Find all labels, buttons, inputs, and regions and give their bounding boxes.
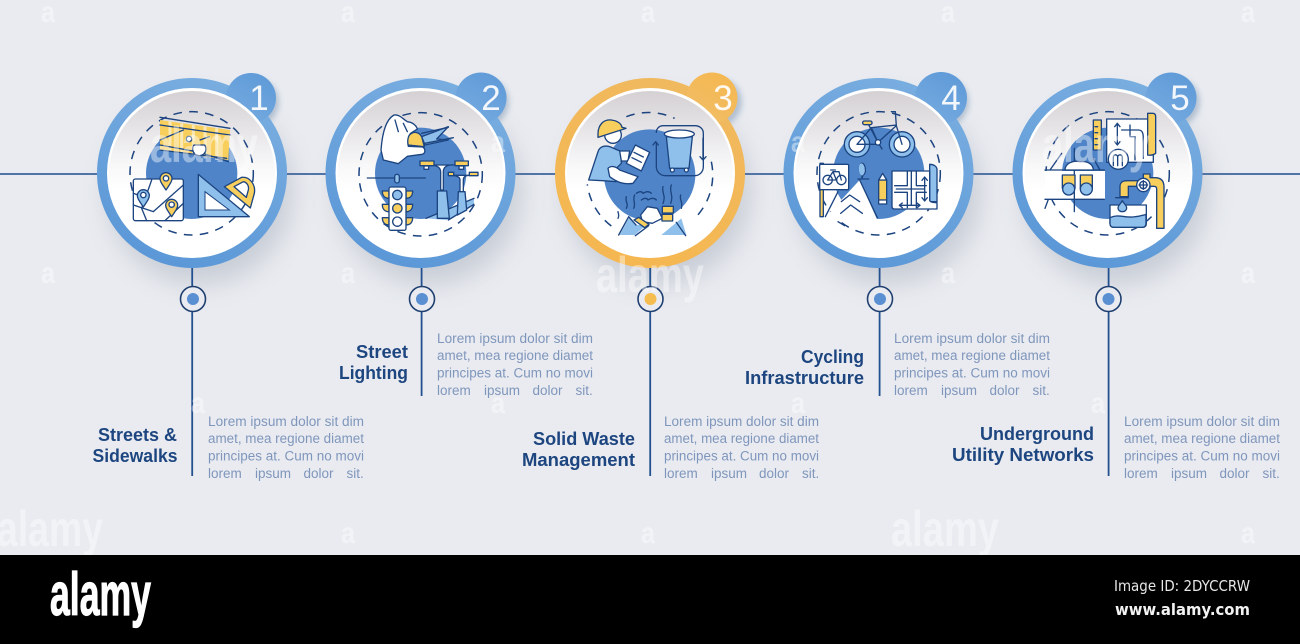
circle badge 4: [784, 72, 980, 284]
connector node 4: [868, 268, 892, 396]
text block 3: amet, mea regione diamet: [664, 431, 819, 446]
text block 5: principes at. Cum no movi: [1124, 448, 1280, 464]
timeline axis: [0, 173, 1300, 175]
text block 4: principes at. Cum no movi: [894, 366, 1050, 380]
stock watermarks: a: [791, 387, 805, 420]
connector node 2: [410, 268, 434, 396]
text block 4: dolor: [990, 383, 1020, 398]
circle badge 2: 2: [481, 79, 501, 118]
circle badge 4: 4: [941, 79, 961, 118]
heading: Cycling Infrastructure: Cycling: [801, 346, 864, 367]
stock watermarks: alamy: [0, 501, 103, 557]
heading: Streets & Sidewalks: [92, 424, 178, 466]
heading: Street Lighting: Lighting: [339, 362, 408, 383]
text block 4: lorem: [894, 383, 928, 398]
footer bar: [0, 555, 1300, 644]
heading: Solid Waste Management: Management: [522, 449, 635, 470]
text block 3: sit.: [802, 466, 819, 481]
stock watermarks: a: [941, 257, 955, 290]
connector node 1: [180, 268, 206, 476]
heading: Solid Waste Management: Solid Waste: [533, 428, 635, 449]
stock watermarks: a: [491, 126, 505, 159]
stock watermarks: a: [1091, 387, 1105, 420]
circle badge 3: [555, 72, 750, 284]
stock watermarks: a: [791, 126, 805, 159]
circle badge 5: [1012, 72, 1208, 284]
text block 3: principes at. Cum no movi: [664, 448, 819, 464]
heading: Streets & Sidewalks: Streets &: [98, 424, 177, 445]
stock watermarks: a: [641, 517, 655, 550]
stock watermarks: alamy: [596, 247, 704, 303]
text block 4: sit.: [1032, 383, 1050, 398]
text block 2: dolor: [532, 383, 563, 398]
text block 4: amet, mea regione diamet: [894, 348, 1050, 363]
text block 5: sit.: [1262, 466, 1280, 481]
text block 2: lorem: [437, 383, 471, 398]
text block 1: ipsum: [255, 466, 291, 481]
step 5: underground utility networks: [952, 72, 1280, 481]
heading: Cycling Infrastructure: Infrastructure: [745, 367, 864, 388]
circle badge 3: 3: [713, 79, 733, 118]
text block 5: Lorem ipsum dolor sit dim: [1124, 414, 1280, 429]
heading: Cycling Infrastructure: [745, 346, 864, 388]
heading: Underground Utility Networks: Utility Networks: [952, 444, 1094, 465]
text block 5: lorem: [1124, 466, 1158, 481]
text block 3: lorem: [664, 466, 698, 481]
icon: bicycle, lane sign, road and street plan: [817, 112, 940, 235]
text block 3: dolor: [759, 466, 790, 481]
connector node 3: [638, 268, 663, 476]
stock watermarks: a: [191, 387, 205, 420]
text block 5: ipsum: [1171, 466, 1207, 481]
stock watermarks: a: [341, 517, 355, 550]
text block 1: amet, mea regione diamet: [208, 431, 364, 446]
text block 3: Lorem ipsum dolor sit dim: [664, 414, 819, 429]
text block 1: principes at. Cum no movi: [208, 448, 364, 464]
text block 3: ipsum: [711, 466, 747, 481]
icon: blueprint, meter, underground pipes and water tap: [1045, 112, 1169, 235]
stock watermarks: alamy: [150, 117, 258, 173]
heading: Underground Utility Networks: [952, 423, 1094, 465]
circle badge 1: 1: [249, 79, 269, 118]
stock watermarks: a: [41, 257, 55, 290]
circle badge 2: [326, 72, 521, 284]
text block 1: sit.: [346, 466, 364, 481]
text block 1: Lorem ipsum dolor sit dim: [208, 414, 364, 429]
image id: Image ID: 2DYCCRW: [1114, 577, 1250, 595]
circle badge 5: 5: [1170, 79, 1190, 118]
heading: Solid Waste Management: [522, 428, 635, 470]
step 4: cycling infrastructure: [745, 72, 1050, 398]
stock watermarks: alamy: [1042, 117, 1150, 173]
step 2: street lighting: [326, 72, 593, 398]
heading: Street Lighting: [339, 341, 408, 383]
text block 4: Lorem ipsum dolor sit dim: [894, 331, 1050, 346]
icon: map, road plan and drafting tools: [130, 112, 255, 235]
heading: Streets & Sidewalks: Sidewalks: [92, 445, 178, 466]
text block 4: ipsum: [941, 383, 977, 398]
icon: glove, bulb, street lamps and traffic light: [359, 113, 482, 236]
heading: Underground Utility Networks: Underground: [980, 423, 1094, 444]
website: www.alamy.com: [1115, 600, 1250, 619]
stock watermarks: a: [1241, 517, 1255, 550]
circle badge 1: [97, 73, 292, 284]
text block 1: dolor: [304, 466, 334, 481]
stock watermarks: alamy: [891, 501, 999, 557]
connector node 5: [1096, 268, 1121, 476]
text block 2: principes at. Cum no movi: [437, 366, 593, 380]
text block 1: lorem: [208, 466, 242, 481]
text block 5: amet, mea regione diamet: [1124, 431, 1280, 446]
text block 2: Lorem ipsum dolor sit dim: [437, 331, 593, 346]
stock watermarks: a: [341, 257, 355, 290]
stock watermarks: a: [1241, 257, 1255, 290]
text block 5: dolor: [1220, 466, 1250, 481]
heading: Street Lighting: Street: [356, 341, 408, 362]
icon: worker, waste bin and landfill: [587, 113, 713, 237]
footer logo: alamy: [50, 561, 151, 628]
step 1: streets and sidewalks: [92, 73, 364, 481]
text block 2: sit.: [576, 383, 593, 398]
text block 2: ipsum: [484, 383, 520, 398]
step 3: solid waste management: [522, 72, 819, 481]
text block 2: amet, mea regione diamet: [437, 348, 593, 363]
stock watermarks: a: [491, 387, 505, 420]
